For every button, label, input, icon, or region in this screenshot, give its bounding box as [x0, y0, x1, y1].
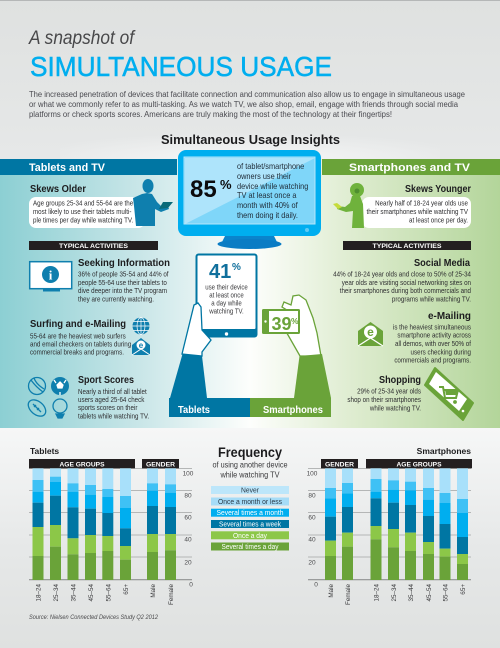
activity: e-mailing: is the heaviest simultaneous: [393, 324, 472, 332]
activity: e-mailing: smartphone activity across: [397, 332, 472, 340]
legend: Several times a month: [216, 510, 284, 517]
activity: shopping: [347, 374, 422, 413]
activity: shopping: Shopping: [379, 374, 421, 386]
typical activities bar: left: [29, 241, 158, 250]
icon: smartphone with shopping cart: [425, 368, 473, 420]
bar chart: smartphones: 55–64: [442, 584, 450, 602]
panel: skews younger: their smartphones while watching TV: [367, 209, 469, 216]
activity: seeking information: dive deeper into the TV program: [78, 288, 167, 295]
title: SIMULTANEOUS USAGE: [30, 51, 332, 82]
heading: tablets chart: Tablets: [30, 446, 59, 456]
activity: e-mailing: e-Mailing: [428, 310, 471, 322]
bar chart: smartphones: Male: [328, 584, 335, 598]
panel: TV callout 85%: 85: [190, 176, 217, 203]
panel: skews older: [29, 183, 145, 228]
bar chart: tablets: 45–54: [88, 584, 95, 602]
illustration: hand holding tablet: watching TV.: [208, 308, 244, 316]
activity: sport scores: users aged 25-64 check: [78, 397, 145, 404]
panel: skews younger: [362, 183, 471, 228]
activity: sport scores: [78, 374, 149, 421]
activity: e-mailing: [393, 310, 472, 365]
activity: e-mailing: all demos, with over 50% of: [395, 341, 471, 348]
heading: frequency: while watching TV: [220, 470, 280, 480]
base label: smartphones: [250, 398, 331, 417]
bar chart: tablets: 18–24: [36, 584, 42, 602]
panel: skews older: ple times per day while watching TV.: [33, 217, 133, 225]
bar chart: tablets: 35–44: [70, 584, 78, 602]
activity: e-mailing: users checking during: [411, 349, 471, 357]
illustration: hand holding tablet: a day while: [211, 300, 242, 308]
header band: tablets and TV: [0, 159, 177, 175]
typical activities bar: right: [343, 241, 471, 250]
illustration: hand holding tablet: use their device: [205, 284, 248, 292]
intro paragraph: [29, 90, 466, 119]
header band: smartphones and TV: [322, 159, 500, 175]
panel: skews younger: at least once per day.: [409, 217, 468, 225]
activity: social media: their smartphones during both commercials and: [340, 288, 471, 295]
bar chart: smartphones: [307, 459, 472, 605]
panel: skews older: Skews Older: [30, 183, 86, 195]
bar chart: smartphones: 60: [308, 514, 316, 522]
illustration: hand holding smartphone: [262, 295, 331, 398]
activity: social media: year olds are visiting social networking sites on: [342, 280, 471, 287]
activity: surfing and e-mailing: Surfing and e-Mailing: [30, 318, 126, 330]
panel: TV callout 85%: [178, 150, 321, 236]
base label: tablets: [169, 398, 250, 417]
bar chart: smartphones: 18–24: [374, 584, 380, 602]
activity: surfing and e-mailing: commercial breaks and programs.: [30, 349, 124, 357]
panel: skews younger: Nearly half of 18-24 year olds use: [375, 200, 468, 208]
panel: TV callout 85%: owners use their: [237, 172, 292, 181]
illustration: hand holding smartphone: 39: [272, 314, 292, 334]
panel: skews older: Age groups 25-34 and 55-64 are the: [33, 200, 133, 208]
legend: Several times a week: [219, 522, 281, 528]
activity: social media: [333, 257, 471, 304]
bar chart: smartphones: 65+: [460, 584, 467, 595]
bar chart: smartphones: 80: [308, 492, 316, 500]
illustration: hand holding tablet: [170, 254, 258, 398]
bar chart: tablets: 65+: [123, 584, 130, 595]
legend: [211, 486, 289, 551]
activity: shopping: while watching TV.: [369, 405, 421, 413]
icon: TV with info symbol: [30, 262, 72, 292]
activity: shopping: 29% of 25-34 year olds: [357, 388, 422, 396]
illustration: hand holding tablet: 41: [209, 261, 231, 283]
intro paragraph: or what we commonly refer to as multi-tasking. As we watch TV, we also shop, email, engage with friends through social media: [29, 100, 459, 109]
activity: seeking information: they are currently watching.: [78, 296, 154, 304]
typical activities bar: left: TYPICAL ACTIVITIES: [59, 243, 129, 250]
bar chart: tablets: AGE GROUPS: [60, 461, 105, 468]
bar chart: smartphones: 40: [308, 536, 316, 544]
heading: frequency: Frequency: [218, 444, 282, 460]
icon: envelope right: e: [367, 325, 374, 339]
bar chart: tablets: 0: [189, 582, 193, 588]
panel: TV callout 85%: them doing it daily.: [237, 211, 298, 220]
bar chart: smartphones: 20: [308, 560, 316, 566]
bar chart: tablets: 25–34: [53, 584, 60, 602]
activity: seeking information: [78, 257, 170, 304]
legend: Never: [241, 488, 260, 494]
intro paragraph: The increased penetration of devices that facilitate connection and communication also allow us to engage in simultaneous usage: [29, 90, 466, 99]
bar chart: tablets: Male: [150, 584, 157, 598]
panel: TV callout 85%: month with 40% of: [237, 201, 298, 210]
section heading: Simultaneous Usage Insights: [161, 133, 340, 147]
header band: smartphones and TV: Smartphones and TV: [349, 162, 471, 174]
activity: sport scores: Nearly a third of all tablet: [78, 389, 147, 396]
activity: seeking information: 36% of people 35-54 and 44% of: [78, 271, 169, 279]
activity: e-mailing: commercials and programs.: [394, 357, 471, 365]
activity: social media: 44% of 18-24 year olds and close to 50% of 25-34: [333, 271, 471, 279]
title: A snapshot of: [28, 28, 136, 49]
bar chart: tablets: Female: [168, 584, 175, 605]
legend: Once a month or less: [218, 499, 282, 506]
activity: sport scores: tablets while watching TV.: [78, 413, 149, 421]
bar chart: smartphones: 0: [314, 582, 318, 588]
bar chart: tablets: 40: [184, 536, 192, 544]
bar chart: smartphones: 45–54: [426, 584, 433, 602]
bar chart: smartphones: 35–44: [408, 584, 415, 602]
base label: smartphones: Smartphones: [263, 404, 323, 416]
activity: social media: programs while watching TV.: [392, 296, 471, 304]
activity: shopping: shop on their smartphones: [347, 397, 422, 404]
header band: tablets and TV: Tablets and TV: [29, 162, 106, 174]
heading: frequency: [212, 444, 288, 480]
icons: sports balls: [25, 377, 69, 419]
legend: Once a day: [233, 533, 267, 540]
bar chart: smartphones: Female: [345, 584, 352, 605]
panel: TV callout 85%: of tablet/smartphone: [237, 162, 304, 171]
bar chart: smartphones: GENDER: [325, 461, 354, 468]
panel: TV callout 85%: %: [220, 177, 232, 192]
illustration: hand holding tablet: at least once: [209, 292, 244, 300]
activity: surfing and e-mailing: [30, 318, 132, 357]
bar chart: tablets: 20: [184, 560, 192, 566]
bar chart: tablets: GENDER: [146, 461, 175, 468]
activity: surfing and e-mailing: 55-64 are the heaviest web surfers: [30, 333, 126, 341]
typical activities bar: right: TYPICAL ACTIVITIES: [372, 243, 442, 250]
bar chart: smartphones: 25–34: [391, 584, 398, 602]
legend: Several times a day: [222, 544, 279, 551]
activity: surfing and e-mailing: and email checkers on tablets during: [30, 341, 132, 349]
icon: person with headphones and smartphone: [333, 183, 364, 228]
heading: frequency: of using another device: [212, 460, 288, 470]
panel: TV callout 85%: TV at least once a: [237, 191, 297, 200]
bar chart: tablets: [29, 459, 194, 605]
TV stand: [218, 236, 282, 249]
bar chart: tablets: 55–64: [105, 584, 112, 602]
icon: envelope right: [358, 322, 383, 346]
title: [28, 28, 332, 82]
illustration: hand holding tablet: %: [232, 262, 241, 273]
panel: TV callout 85%: device while watching: [237, 182, 308, 191]
icon: envelope left: e: [139, 341, 144, 350]
activity: sport scores: Sport Scores: [78, 374, 134, 386]
bar chart: tablets: 60: [184, 514, 192, 522]
base label: tablets: Tablets: [178, 404, 210, 416]
icon: envelope left: [132, 338, 150, 355]
bar chart: smartphones: 100: [307, 470, 318, 478]
activity: sport scores: sports scores on their: [78, 405, 138, 412]
bar chart: tablets: 100: [183, 470, 194, 478]
panel: skews younger: Skews Younger: [405, 183, 471, 195]
icon: globe: [132, 318, 150, 334]
panel: skews older: most likely to use their tablets multi-: [33, 209, 131, 216]
source note: Source: Nielsen Connected Devices Study Q2 2012: [29, 614, 158, 621]
icon: TV with info symbol: i: [49, 268, 53, 282]
activity: social media: Social Media: [414, 257, 470, 269]
bar chart: tablets: 80: [184, 492, 192, 500]
intro paragraph: platforms or check sports scores. Americans are truly making the most of the technology at their fingertips!: [29, 110, 392, 119]
bar chart: smartphones: AGE GROUPS: [396, 461, 442, 468]
activity: seeking information: people 55-64 use their tablets to: [78, 280, 167, 287]
icon: man with tablet: [133, 179, 173, 226]
illustration: hand holding smartphone: %: [291, 316, 299, 326]
activity: seeking information: Seeking Information: [78, 257, 170, 269]
heading: smartphones chart: Smartphones: [417, 446, 471, 456]
